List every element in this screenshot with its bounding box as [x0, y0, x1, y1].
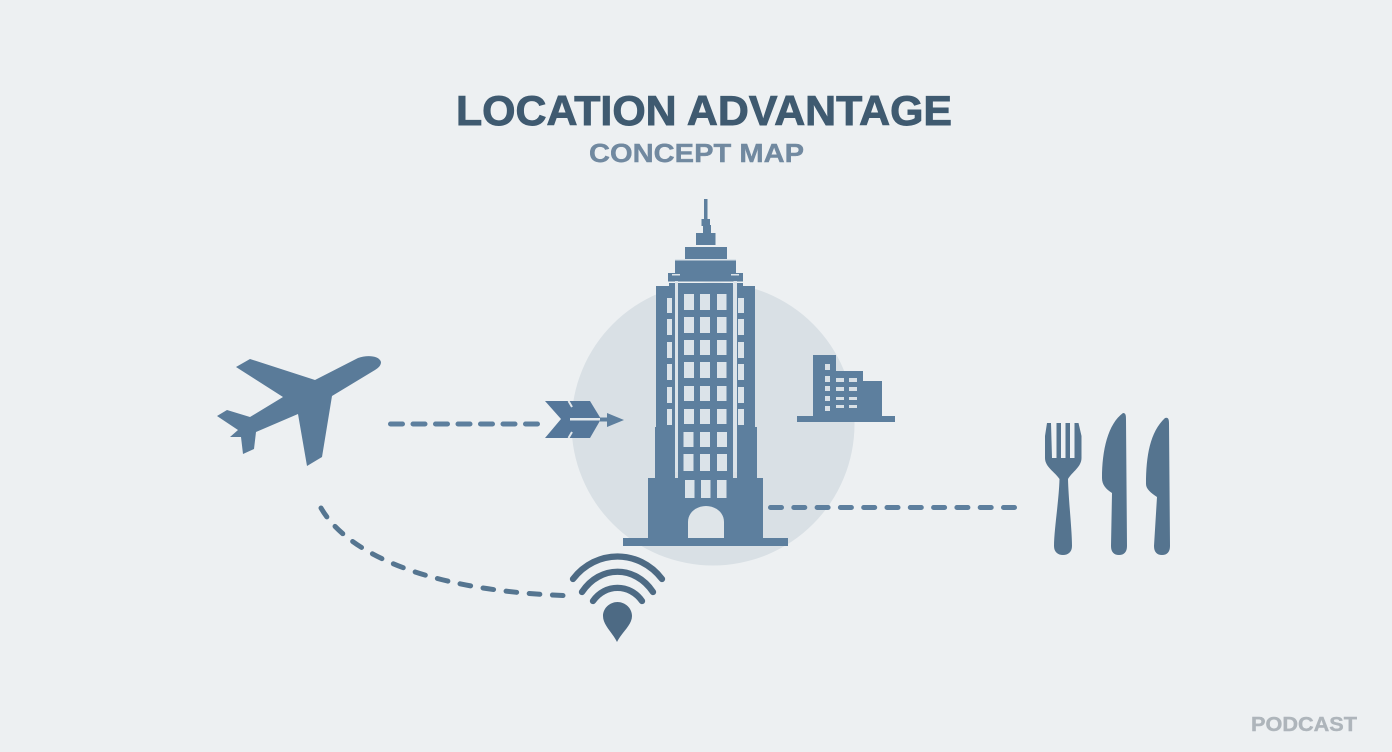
title: LOCATION ADVANTAGE	[456, 87, 952, 134]
dashed curve: plane to wifi	[321, 508, 563, 596]
location pin	[603, 602, 632, 642]
arrow: plane to tower dashed line	[390, 422, 547, 426]
icon: fork and knives	[1045, 413, 1170, 555]
icon: wifi location pin	[573, 556, 662, 642]
dashed connector: tower to dining	[770, 505, 1016, 510]
tower windows	[667, 259, 744, 498]
icon: small office building	[797, 355, 895, 422]
arch doorway	[688, 506, 724, 538]
icon: central skyscraper	[623, 199, 788, 546]
subtitle: CONCEPT MAP	[589, 138, 804, 168]
footer label: PODCAST	[1251, 713, 1357, 736]
office windows	[825, 364, 857, 411]
icon: airplane	[217, 356, 381, 466]
knife	[1102, 413, 1127, 555]
background circle	[572, 282, 854, 566]
fork	[1045, 423, 1082, 555]
icon: chevron arrow	[545, 401, 624, 438]
second knife	[1146, 418, 1170, 555]
